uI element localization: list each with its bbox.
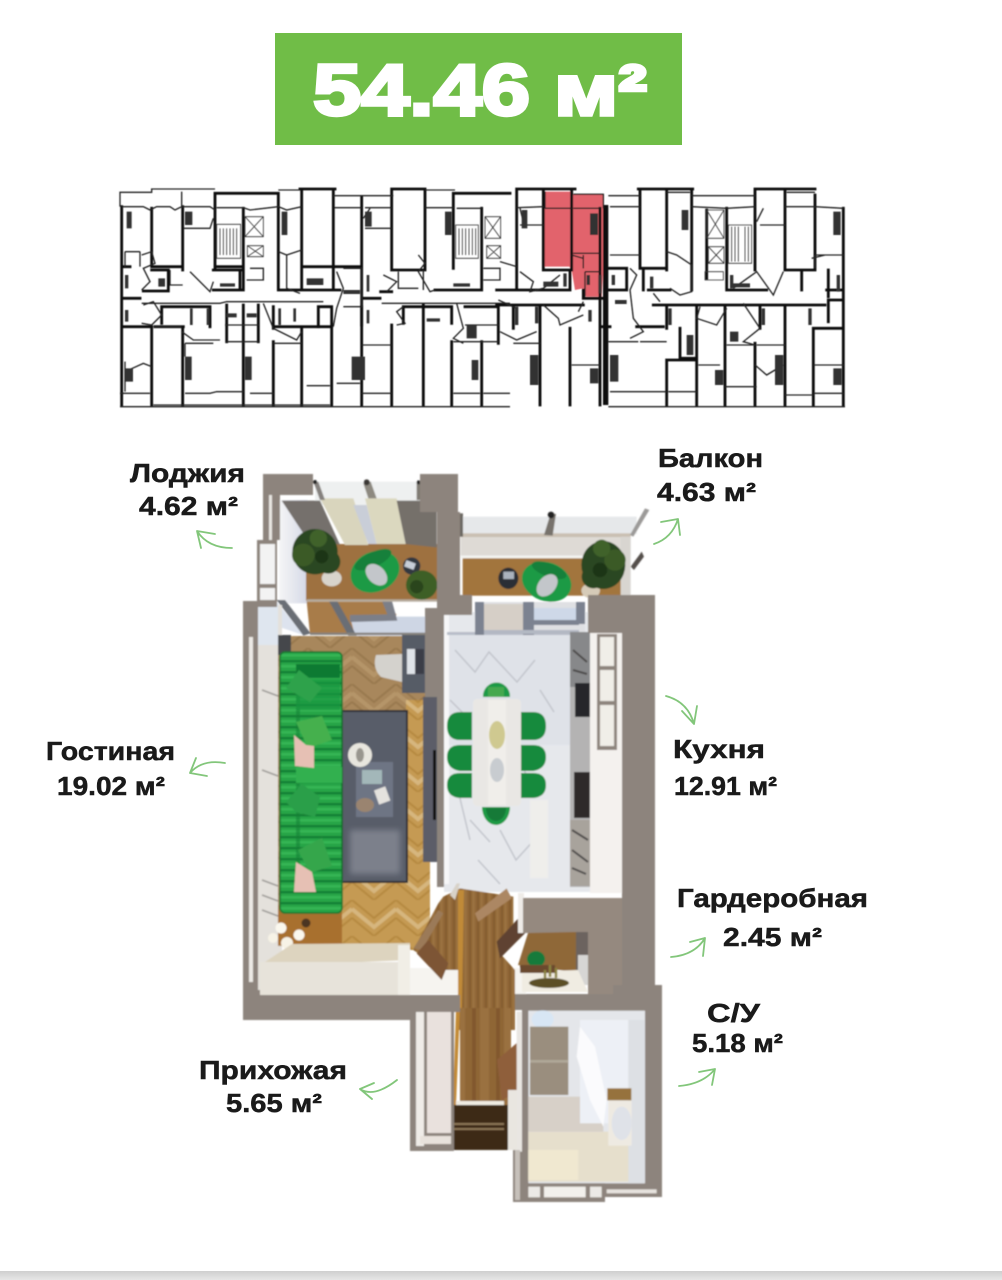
structural walls (243, 474, 662, 1202)
panel: loggia (260, 479, 438, 636)
hallway doors (413, 883, 527, 980)
console (260, 943, 410, 995)
label: hallway: 5.65 м² (226, 1088, 322, 1118)
label: balcony: 4.63 м² (657, 477, 756, 507)
label: wardrobe: 2.45 м² (723, 922, 822, 952)
label: living room (46, 736, 175, 801)
label: kitchen: 12.91 м² (674, 771, 777, 801)
arrow: bathroom (679, 1069, 715, 1086)
arrow: living room (190, 758, 225, 776)
label: bathroom: 5.18 м² (692, 1028, 783, 1058)
bathroom window frame (515, 1150, 657, 1201)
entrance door (450, 1101, 508, 1150)
floor lamp (268, 918, 310, 949)
arrow: balcony (654, 519, 680, 544)
label: hallway: Прихожая (199, 1055, 347, 1085)
label: hallway (199, 1055, 347, 1118)
panel: balcony (458, 508, 649, 608)
icon: balcony plant (581, 540, 626, 598)
label: living room: 19.02 м² (57, 771, 165, 801)
desk and chair (375, 635, 426, 693)
label: kitchen: Кухня (673, 734, 765, 764)
icon: loggia side table and plant (403, 557, 437, 600)
key plan right section walls (497, 189, 845, 407)
washing machine and shelf (607, 1088, 632, 1146)
panel: living room floor (258, 605, 437, 995)
label: loggia: 4.62 м² (139, 491, 238, 521)
label: bathroom (692, 998, 783, 1058)
side window frame (257, 540, 277, 601)
panel: wardrobe (518, 893, 622, 994)
sofa (280, 652, 342, 913)
round side table (348, 743, 372, 767)
apartment floor plan (243, 474, 662, 1202)
label: bathroom: С/У (707, 998, 761, 1028)
label: loggia (130, 458, 245, 521)
kitchen counter stone (570, 632, 590, 887)
title badge: total area (275, 33, 682, 145)
label: balcony: Балкон (658, 443, 763, 473)
arrow: wardrobe (671, 938, 705, 957)
building key plan (120, 189, 845, 407)
arrow: loggia (197, 531, 232, 548)
icon: toilet (532, 1010, 554, 1028)
dining table and chairs (447, 682, 546, 825)
panel: hallway (410, 883, 527, 1151)
bath mat (530, 1027, 568, 1095)
label: loggia: Лоджия (130, 458, 245, 488)
label: kitchen (673, 734, 777, 801)
label: wardrobe: Гардеробная (677, 883, 868, 913)
highlighted apartment on key plan (543, 192, 603, 297)
hallway closet (410, 1012, 454, 1151)
icon: balcony table (498, 568, 518, 589)
kitchen window frames (475, 602, 585, 635)
title badge: total area: 54.46 м² (313, 51, 647, 131)
key plan left section walls (120, 189, 510, 407)
coffee table (356, 762, 393, 817)
TV panel (423, 697, 437, 862)
label: wardrobe (677, 883, 868, 952)
kitchen cabinets (590, 616, 622, 893)
panel: kitchen (444, 602, 622, 893)
hall white floor patches (410, 968, 526, 994)
icon: balcony armchair (516, 555, 577, 608)
bathroom room interior (515, 1010, 657, 1201)
icon: loggia plant (292, 529, 342, 586)
icon: loggia armchair (344, 543, 406, 600)
bottom page shadow strip (0, 1271, 1002, 1280)
label: living room: Гостиная (46, 736, 175, 766)
rug (342, 711, 407, 882)
arrow: hallway (360, 1080, 397, 1099)
arrow: kitchen (666, 696, 697, 724)
label: balcony (657, 443, 763, 507)
